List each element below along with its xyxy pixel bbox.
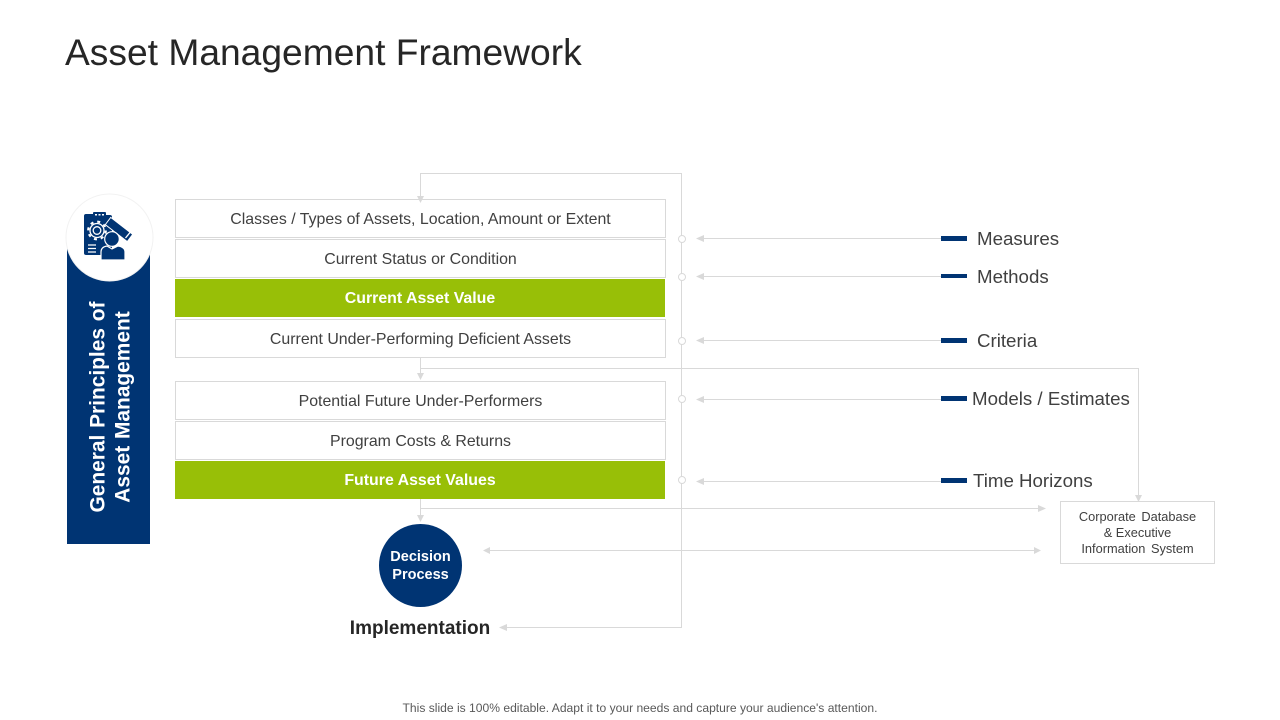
legend marker: methods — [941, 274, 967, 278]
legend marker: criteria — [941, 338, 967, 343]
corporate database box: Corporate Database — [1079, 509, 1196, 524]
sidebar heading — [86, 302, 134, 512]
text block: future asset values: Future Asset Values — [344, 472, 496, 489]
text block: classes and types: Classes / Types of Assets, Location, Amount or Extent — [230, 211, 611, 228]
text block: under-performing assets — [175, 319, 666, 358]
decision process circle: Process — [392, 567, 449, 583]
corporate database box: Information System — [1081, 541, 1194, 556]
text block: future asset values — [175, 461, 665, 499]
footer note: This slide is 100% editable. Adapt it to your needs and capture your audience's attention. — [403, 701, 877, 715]
legend marker: measures — [941, 236, 967, 241]
label: time horizons: Time Horizons — [973, 470, 1093, 491]
text block: current asset value — [175, 279, 665, 317]
decision process circle: Decision — [390, 549, 451, 565]
implementation label: Implementation — [350, 618, 490, 639]
label: criteria: Criteria — [977, 330, 1037, 351]
label: methods: Methods — [977, 266, 1049, 287]
text block: classes and types — [175, 199, 666, 238]
icon: asset management badge — [66, 194, 154, 282]
text block: current status: Current Status or Condition — [324, 251, 517, 268]
label: models and estimates: Models / Estimates — [972, 388, 1130, 409]
corporate database box: & Executive — [1104, 525, 1171, 540]
text block: potential under-performers: Potential Future Under-Performers — [299, 393, 542, 410]
panel: general principles sidebar — [67, 240, 150, 544]
title: Asset Management Framework — [65, 31, 582, 73]
sidebar heading: General Principles of — [86, 302, 110, 512]
text block: program costs — [175, 421, 666, 460]
label: measures: Measures — [977, 228, 1059, 249]
text block: current status — [175, 239, 666, 278]
text block: current asset value: Current Asset Value — [345, 290, 495, 307]
sidebar heading: Asset Management — [112, 311, 134, 503]
legend marker: models — [941, 396, 967, 401]
legend marker: time horizons — [941, 478, 967, 483]
text block: potential under-performers — [175, 381, 666, 420]
text block: under-performing assets: Current Under-Performing Deficient Assets — [270, 331, 571, 348]
text block: program costs: Program Costs & Returns — [330, 433, 511, 450]
corporate database box — [1060, 501, 1215, 564]
decision process circle — [379, 524, 462, 607]
